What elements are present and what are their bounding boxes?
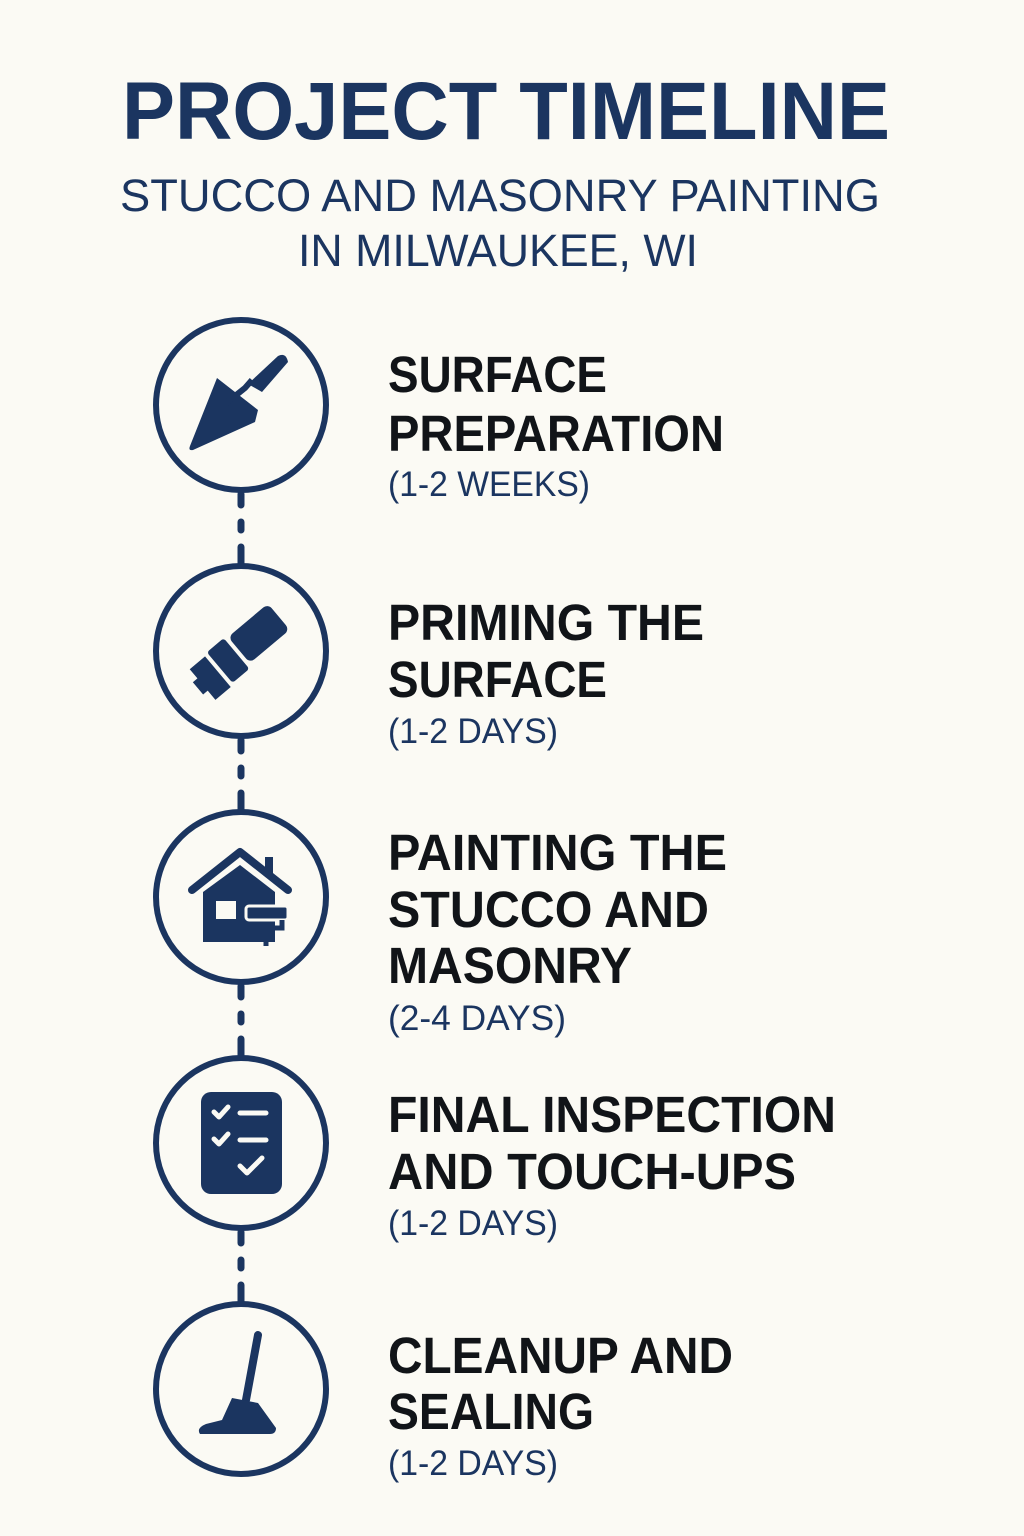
step 5: cleanup: (1-2 DAYS) — [388, 1444, 558, 1483]
step 1: surface preparation: PREPARATION — [388, 405, 724, 462]
step 3: painting: MASONRY — [388, 937, 632, 994]
icon: broom — [156, 1304, 326, 1474]
step 5: cleanup: SEALING — [388, 1383, 594, 1440]
subtitle: STUCCO AND MASONRY PAINTING — [120, 170, 880, 221]
step 1: surface preparation: SURFACE — [388, 346, 607, 403]
step 3: painting — [156, 812, 727, 1038]
step 5: cleanup — [156, 1304, 733, 1483]
step 3: painting: PAINTING THE — [388, 824, 727, 881]
step 5: cleanup: CLEANUP AND — [388, 1327, 733, 1384]
subtitle — [120, 170, 880, 276]
step 1: surface preparation — [156, 320, 724, 504]
subtitle: IN MILWAUKEE, WI — [298, 225, 698, 276]
icon: checklist — [156, 1058, 326, 1228]
step 2: priming: PRIMING THE — [388, 594, 704, 651]
step 4: inspection: FINAL INSPECTION — [388, 1086, 836, 1143]
title: PROJECT TIMELINE — [122, 66, 890, 157]
step 3: painting: (2-4 DAYS) — [388, 999, 566, 1038]
icon: paint brush — [156, 566, 326, 736]
step 2: priming — [156, 566, 704, 751]
step 3: painting: STUCCO AND — [388, 881, 709, 938]
timeline connectors — [238, 494, 244, 1301]
step 2: priming: (1-2 DAYS) — [388, 712, 558, 751]
step 4: inspection — [156, 1058, 836, 1243]
icon: trowel — [156, 320, 326, 490]
step 4: inspection: AND TOUCH-UPS — [388, 1143, 796, 1200]
step 1: surface preparation: (1-2 WEEKS) — [388, 465, 590, 504]
step 4: inspection: (1-2 DAYS) — [388, 1204, 558, 1243]
step 2: priming: SURFACE — [388, 651, 607, 708]
icon: house with roller — [156, 812, 326, 982]
